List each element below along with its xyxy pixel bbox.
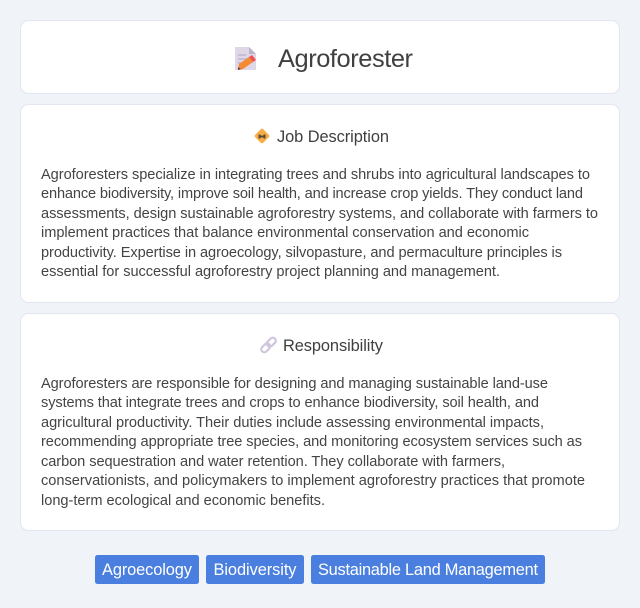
heading: job description: Job Description [277,128,389,146]
text block: responsibility: Agroforesters are responsible for designing and managing sustainable land-use [41,376,548,392]
tag: Biodiversity [206,555,304,584]
text block: job description [41,167,598,280]
title: Agroforester [278,45,414,73]
tag: Sustainable Land Management [311,555,545,584]
text block: responsibility: long-term ecological and economic benefits. [41,493,325,509]
text block: responsibility: agricultural productivity. Their duties include assessing environmental impacts, [41,415,544,431]
text block: responsibility: carbon sequestration and water retention. They collaborate with farmers, [41,454,505,470]
text block: job description: productivity. Expertise in agroecology, silvopasture, and permaculture principles is [41,245,562,261]
tag: Sustainable Land Management: Sustainable Land Management [318,561,538,579]
text block: responsibility: recommending appropriate tree species, and monitoring ecosystem services such as [41,434,582,450]
icon: document with pencil [235,47,256,70]
text block: job description: implement practices that balance environmental conservation and economic [41,225,529,241]
tag: Biodiversity: Biodiversity [214,561,297,579]
panel: job description [20,104,620,302]
tag: Agroecology [95,555,199,584]
panel: responsibility [20,314,620,530]
tag: Agroecology: Agroecology [102,561,193,579]
text block: job description: essential for successful agroforestry project planning and management. [41,264,500,280]
panel: title card [20,20,620,94]
text block: responsibility [41,376,585,509]
icon: link [260,337,277,353]
icon: orange diamond [254,128,270,144]
text block: responsibility: systems that integrate trees and crops to enhance biodiversity, soil health, and [41,395,539,411]
heading: responsibility: Responsibility [283,337,384,355]
text block: job description: assessments, design sustainable agroforestry systems, and collaborate with farmers to [41,206,598,222]
text block: responsibility: conservationists, and policymakers to implement agroforestry practices that promote [41,473,585,489]
text block: job description: Agroforesters specialize in integrating trees and shrubs into agricultural landscapes to [41,167,590,183]
text block: job description: enhance biodiversity, improve soil health, and increase crop yields. They conduct land [41,186,583,202]
